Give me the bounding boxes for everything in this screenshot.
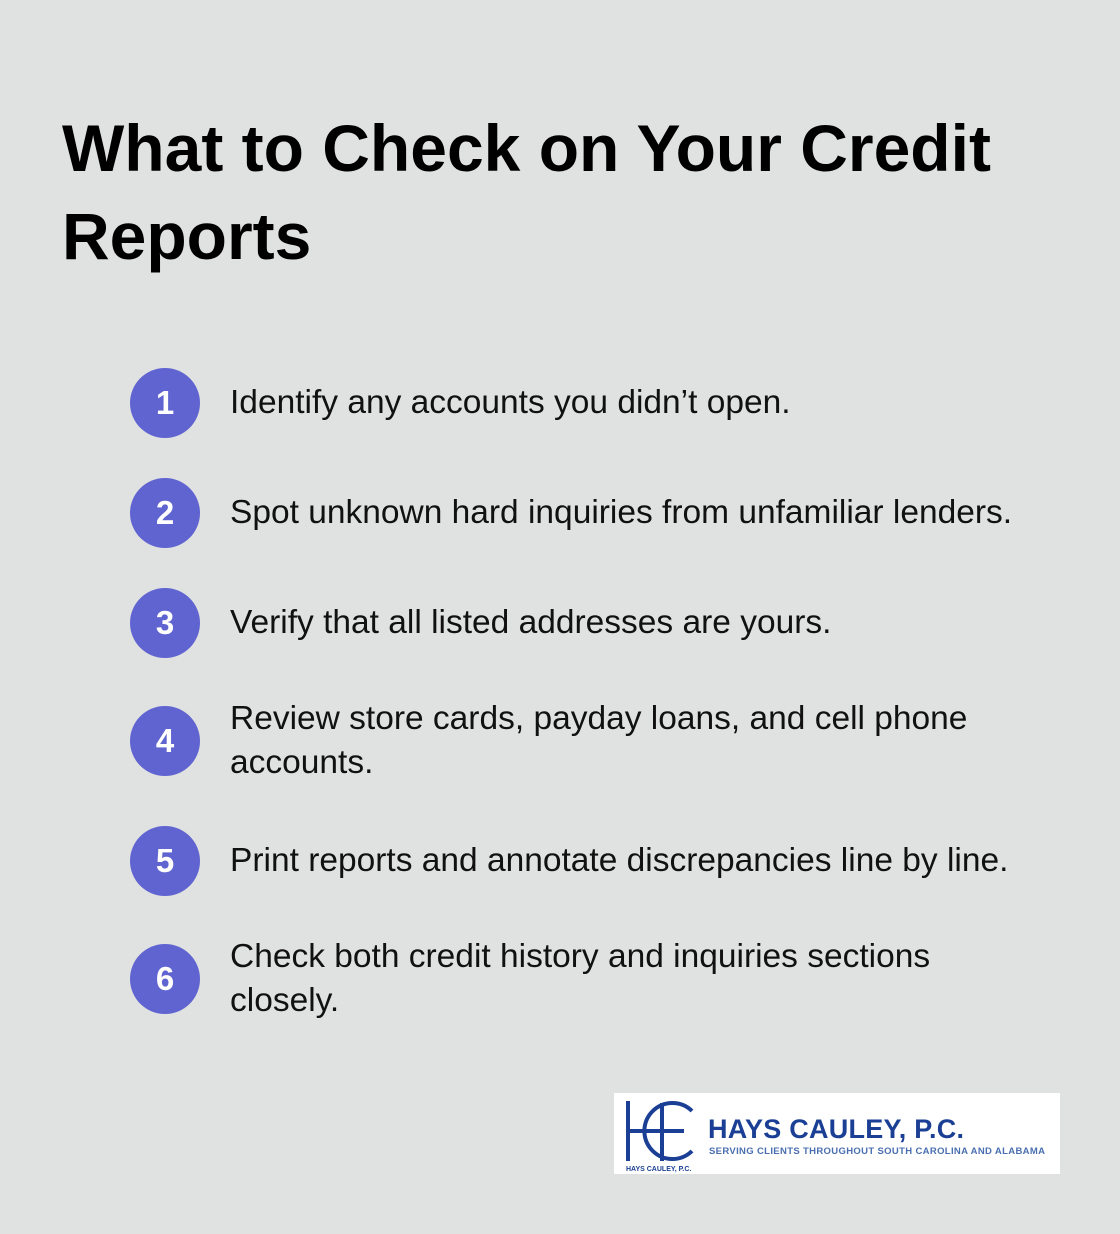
item 4: 4 bbox=[156, 722, 174, 759]
item 2: 2 bbox=[156, 494, 174, 531]
title: What to Check on Your Credit Reports bbox=[62, 111, 991, 273]
item 1: 1 bbox=[156, 384, 174, 421]
item 5 bbox=[130, 826, 1008, 896]
item 6: Check both credit history and inquiries sections closely. bbox=[230, 938, 930, 1019]
item 3 bbox=[130, 588, 831, 658]
logo: HAYS CAULEY, P.C. bbox=[626, 1166, 691, 1173]
item 5: 5 bbox=[156, 842, 174, 879]
item 1: Identify any accounts you didn’t open. bbox=[230, 384, 791, 421]
item 3: 3 bbox=[156, 604, 174, 641]
logo bbox=[614, 1093, 1060, 1174]
logo: SERVING CLIENTS THROUGHOUT SOUTH CAROLINA AND ALABAMA bbox=[709, 1146, 1045, 1157]
item 2 bbox=[130, 478, 1012, 548]
item 4: Review store cards, payday loans, and cell phone accounts. bbox=[230, 700, 967, 781]
item 2: Spot unknown hard inquiries from unfamiliar lenders. bbox=[230, 494, 1012, 531]
logo: HAYS CAULEY, P.C. bbox=[708, 1114, 964, 1144]
item 6: 6 bbox=[156, 960, 174, 997]
item 3: Verify that all listed addresses are yours. bbox=[230, 604, 831, 641]
item 5: Print reports and annotate discrepancies line by line. bbox=[230, 842, 1008, 879]
item 1 bbox=[130, 368, 791, 438]
